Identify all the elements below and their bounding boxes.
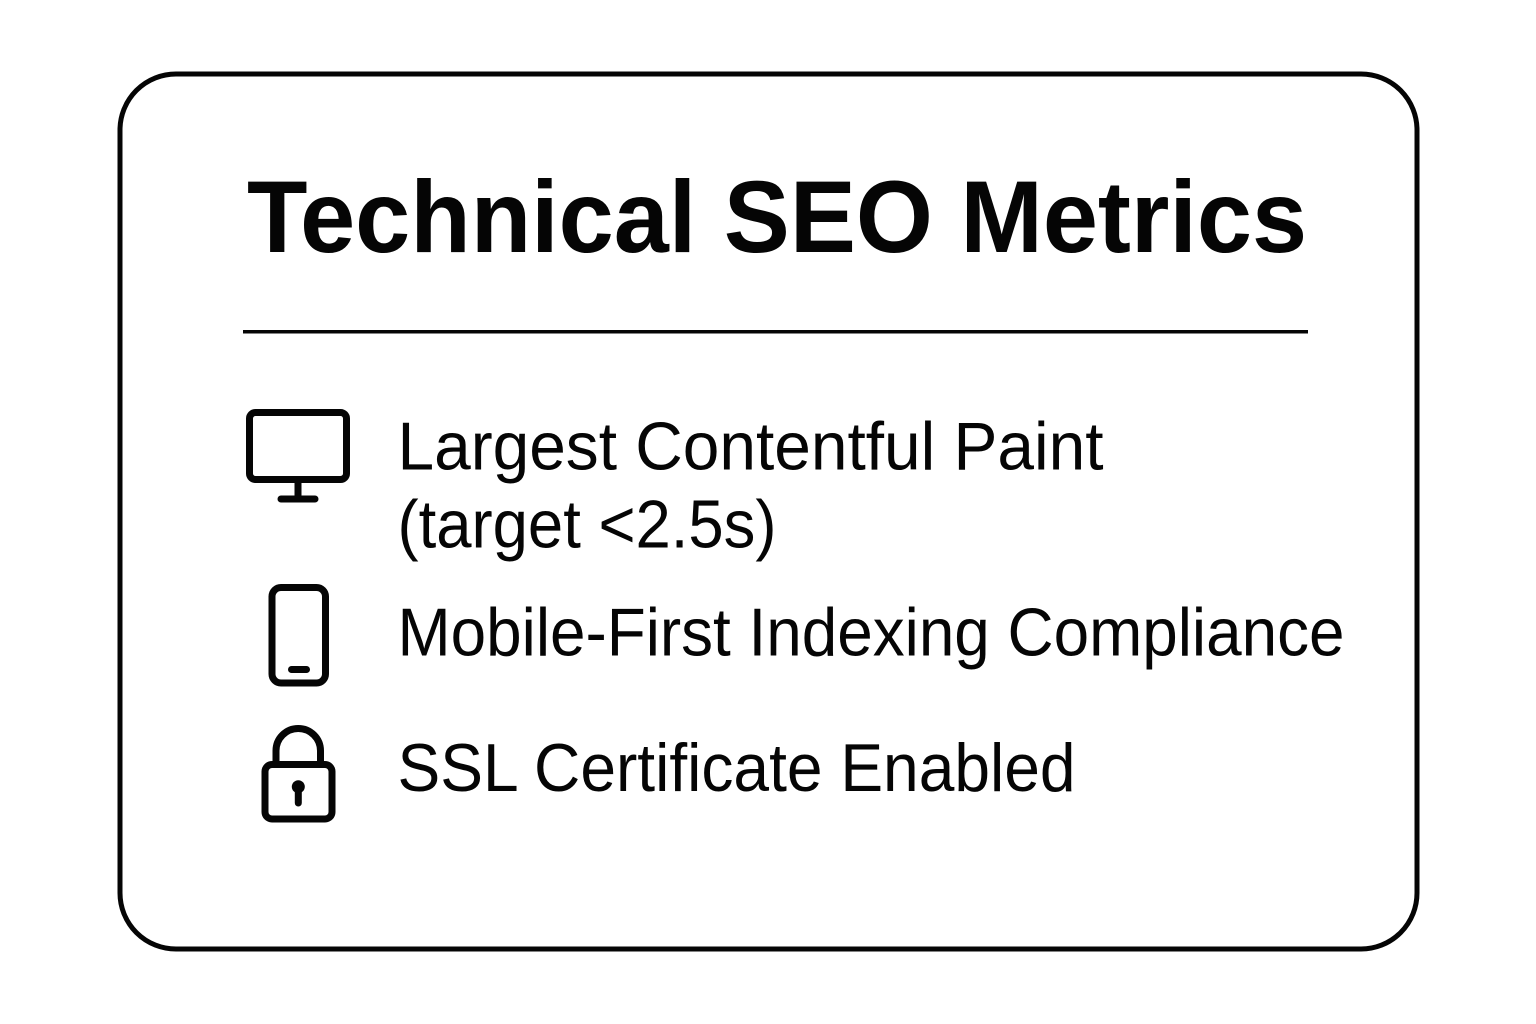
metric: mobile-first indexing: Mobile-First Indexing Compliance xyxy=(398,594,1344,670)
panel: card xyxy=(120,74,1417,949)
title: Technical SEO Metrics xyxy=(247,160,1307,274)
metric: largest contentful paint: (target <2.5s) xyxy=(398,486,776,562)
divider xyxy=(243,330,1308,334)
icon: mobile phone xyxy=(272,588,326,683)
icon: padlock xyxy=(265,728,332,819)
metric: largest contentful paint: Largest Contentful Paint xyxy=(398,408,1104,484)
metric: ssl certificate: SSL Certificate Enabled xyxy=(398,730,1076,806)
icon: monitor xyxy=(250,412,346,499)
